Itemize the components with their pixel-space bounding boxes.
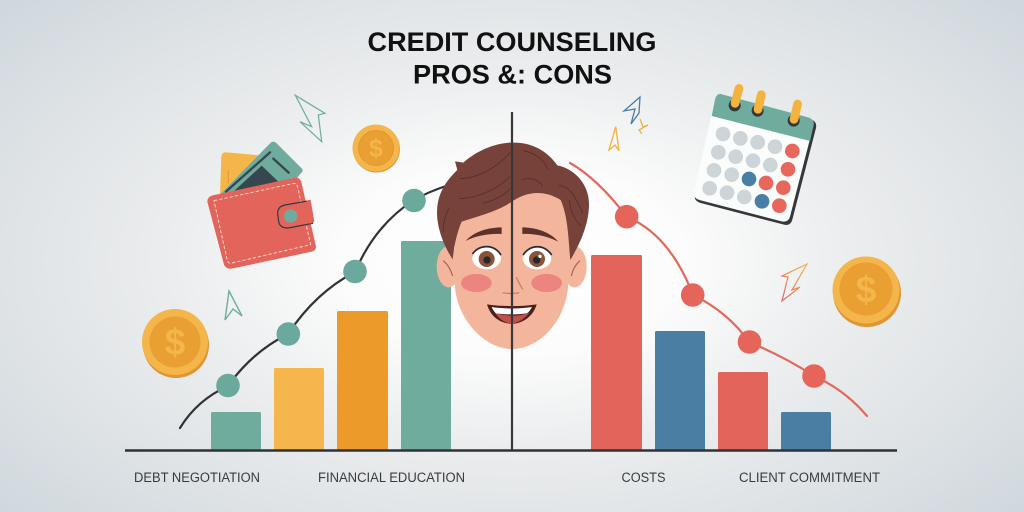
rings (729, 99, 800, 127)
icon: coin left (142, 309, 209, 378)
nose (503, 277, 523, 293)
icon: teal lightning (295, 95, 325, 142)
eyes (472, 247, 501, 269)
title: PROS &: CONS (413, 60, 612, 90)
hair (437, 143, 589, 260)
dark phone (233, 166, 278, 192)
icon: coin small: $ (369, 134, 383, 162)
icon: coin small (352, 124, 400, 172)
bar chart: pros (211, 241, 451, 451)
cheeks (461, 274, 492, 292)
icon: wallet (207, 142, 316, 269)
mouth (487, 304, 537, 324)
title: CREDIT COUNSELING (368, 27, 656, 57)
labels (134, 470, 880, 485)
label: financial education: FINANCIAL EDUCATION (318, 470, 465, 485)
green card (221, 142, 303, 194)
divider line (511, 112, 513, 450)
axis line (125, 449, 897, 452)
icon: face (437, 143, 589, 349)
face shape (454, 173, 571, 349)
hair strands (443, 151, 583, 232)
wallet body (207, 178, 316, 269)
calendar header (712, 94, 814, 141)
label: debt negotiation: DEBT NEGOTIATION (134, 470, 260, 485)
icon: yellow arrow (609, 127, 619, 151)
icon: blue lightning (624, 97, 640, 124)
yellow card (220, 152, 270, 197)
icon: coin right (832, 256, 901, 327)
stitching (214, 183, 311, 263)
trend curve: pros (180, 186, 446, 428)
date dots (702, 127, 782, 204)
wallet clasp (278, 201, 313, 228)
icon: teal arrow (225, 291, 242, 320)
label: costs: COSTS (622, 470, 666, 485)
bar chart: cons (591, 255, 831, 451)
calendar page (694, 94, 814, 222)
label: client commitment: CLIENT COMMITMENT (739, 470, 880, 485)
trend curve: cons (570, 163, 867, 416)
eyebrows (466, 227, 502, 241)
ears (437, 246, 587, 287)
calendar shadow (695, 97, 816, 225)
icon: calendar (694, 88, 816, 225)
icon: coin right: $ (856, 269, 877, 310)
icon: gradient lightning (782, 264, 807, 301)
icon: coin left: $ (165, 322, 186, 362)
icon: orange zigzag (639, 119, 648, 134)
title (368, 27, 656, 90)
